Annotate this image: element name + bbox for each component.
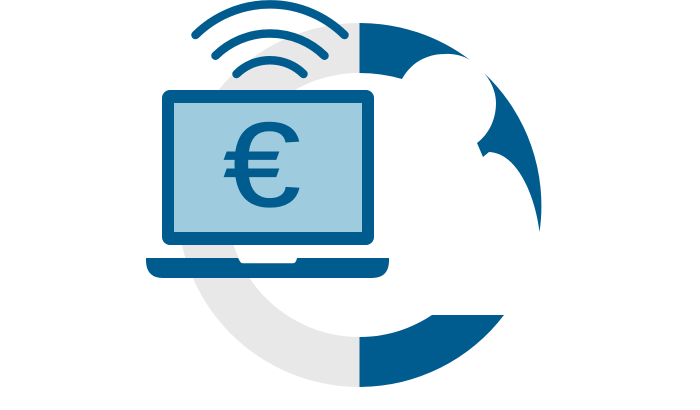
ring: grey left half xyxy=(178,23,360,387)
laptop lid xyxy=(162,90,374,245)
euro symbol: € xyxy=(223,97,301,232)
wifi outer arc xyxy=(196,4,344,35)
icon: wifi signal xyxy=(196,4,344,74)
ring: blue right segment xyxy=(477,73,541,232)
wifi middle arc xyxy=(216,34,324,56)
laptop base xyxy=(146,258,389,278)
ring: blue bottom segment xyxy=(360,315,504,387)
laptop screen xyxy=(174,103,362,232)
icon: laptop xyxy=(146,90,389,278)
ring: blue upper segment xyxy=(360,23,470,79)
wifi inner arc xyxy=(236,60,304,74)
